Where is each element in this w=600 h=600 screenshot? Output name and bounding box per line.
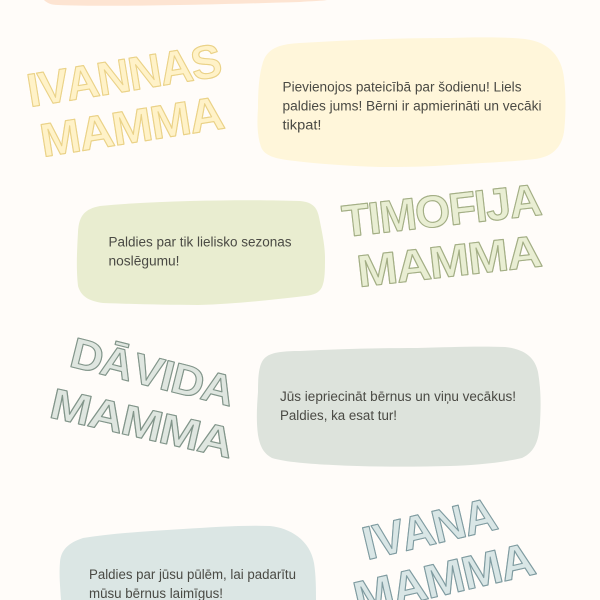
heading: Timofija mamma: MAMMA [354, 225, 544, 297]
heading: Ivannas mamma: MAMMA [36, 86, 227, 167]
heading: Ivana mamma [348, 487, 539, 600]
quote text [89, 567, 296, 600]
quote text [280, 389, 516, 424]
heading: Dāvida mamma: DĀVIDA [66, 329, 239, 416]
quote text: Paldies, ka esat tur! [280, 408, 397, 424]
panel: Ivannas mamma [23, 33, 565, 167]
quote text: noslēgumu! [108, 254, 180, 270]
panel: peach speech bubble top [44, 0, 327, 6]
panel: Timofija mamma [77, 174, 544, 305]
quote text: tikpat! [282, 118, 322, 134]
heading: Ivana mamma: IVANA [357, 487, 501, 570]
heading: Ivannas mamma [23, 33, 227, 167]
green bubble [77, 200, 325, 305]
quote text: Paldies par jūsu pūlēm, lai padarītu [89, 567, 296, 583]
quote text: Paldies par tik lielisko sezonas [108, 234, 292, 250]
yellow bubble [257, 37, 566, 167]
heading: Dāvida mamma: MAMMA [46, 380, 237, 468]
quote text [108, 234, 292, 270]
quote text: Jūs iepriecināt bērnus un viņu vecākus! [280, 389, 516, 405]
heading: Dāvida mamma [46, 329, 239, 468]
quote text: paldies jums! Bērni ir apmierināti un vecāki [282, 98, 542, 114]
panel: Ivana mamma [60, 487, 539, 600]
quote text: Pievienojos pateicībā par šodienu! Liels [282, 80, 522, 96]
grey-green bubble [257, 347, 541, 467]
blue bubble [60, 526, 316, 600]
heading: Timofija mamma: TIMOFIJA [339, 174, 544, 247]
panel: Dāvida mamma [46, 329, 541, 468]
heading: Timofija mamma [339, 174, 544, 297]
quote text [282, 80, 542, 134]
heading: Ivannas mamma: IVANNAS [23, 33, 224, 117]
